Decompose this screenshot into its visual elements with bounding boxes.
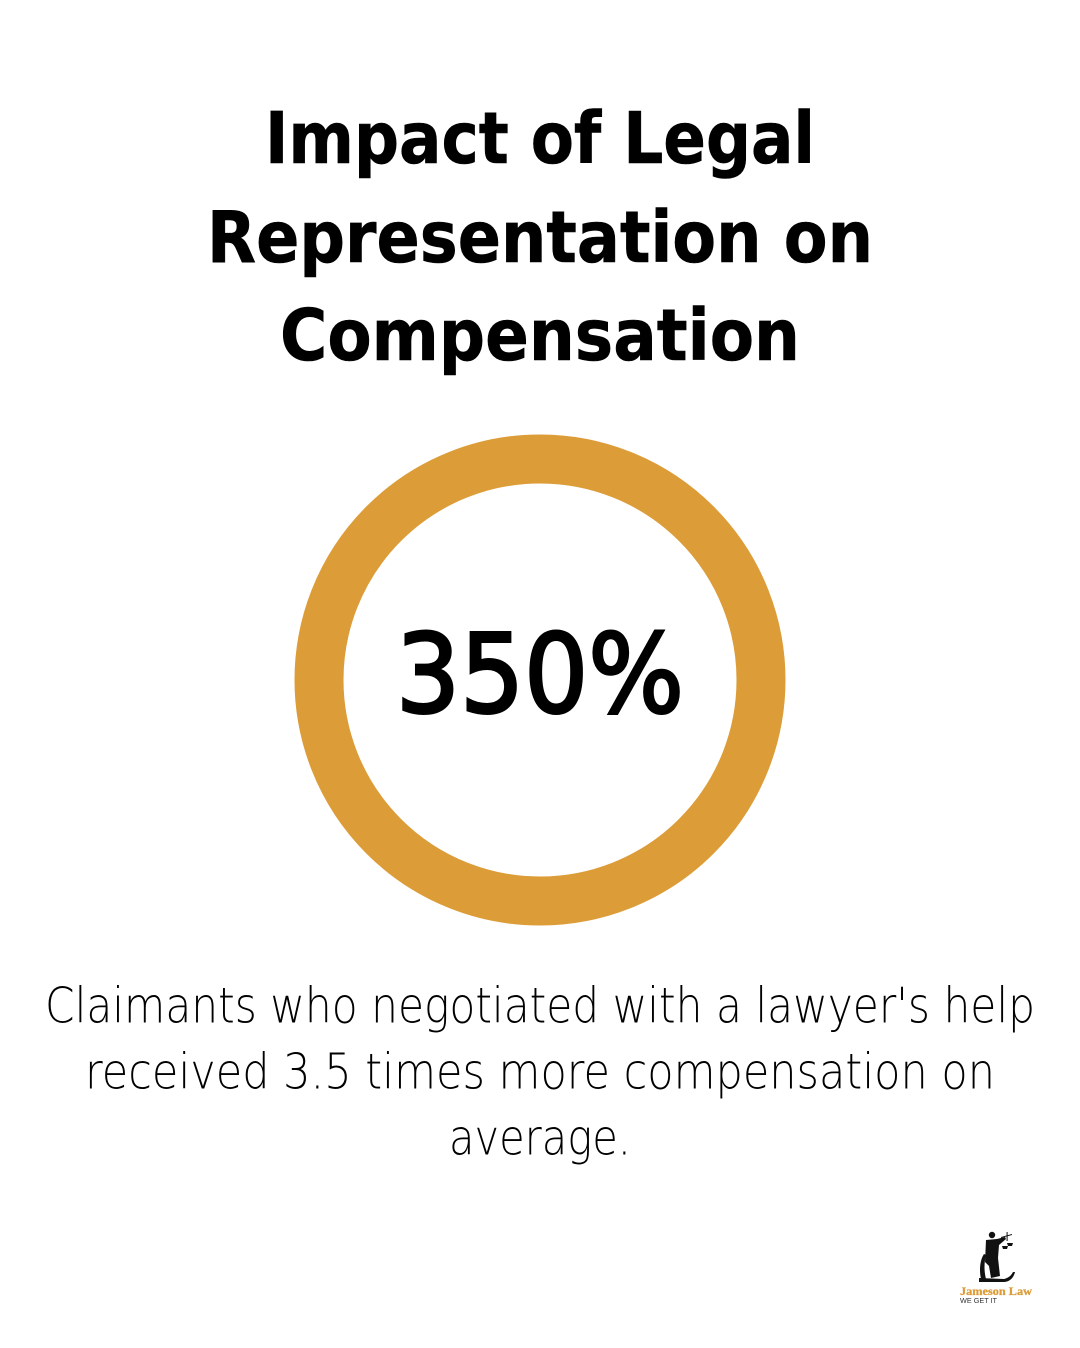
description text: [45, 978, 1035, 1166]
statistic: 350%: 350%: [396, 611, 684, 738]
description text: average.: [449, 1110, 631, 1166]
logo tagline: WE GET IT: [960, 1298, 998, 1305]
icon: lady justice with scales: [979, 1232, 1015, 1282]
title: Representation on: [207, 196, 873, 279]
title: Impact of Legal: [265, 97, 815, 180]
logo: Jameson Law: [960, 1232, 1033, 1305]
title: [207, 97, 873, 377]
ring chart: [319, 459, 761, 901]
logo name: Jameson Law: [960, 1286, 1033, 1298]
title: Compensation: [280, 294, 800, 377]
